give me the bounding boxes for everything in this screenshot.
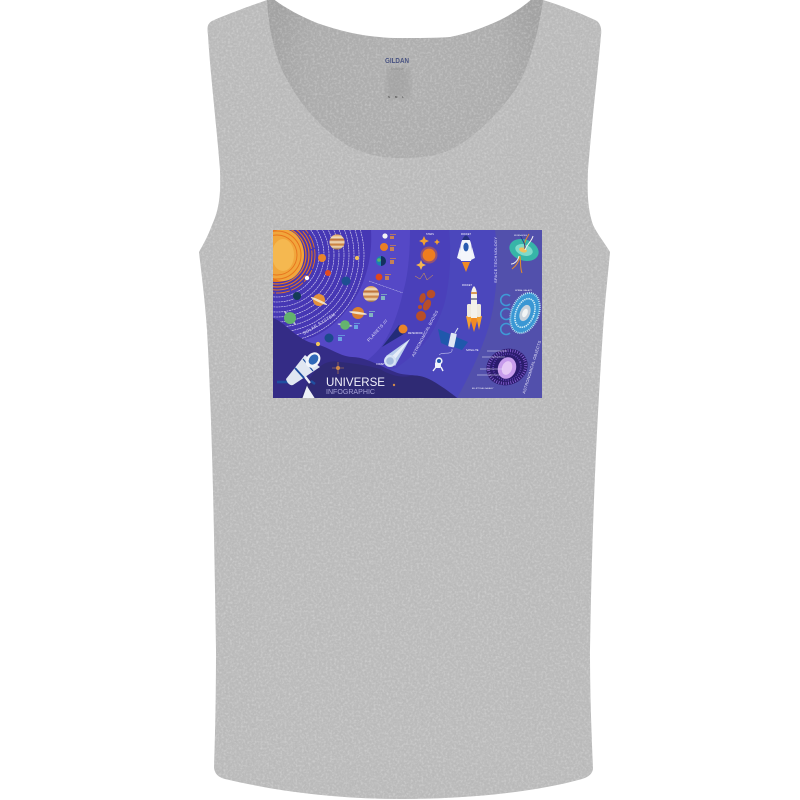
band: astronomical bodies — [273, 230, 450, 398]
mount — [303, 374, 310, 383]
icon: elliptical galaxy — [481, 343, 533, 391]
planet: red — [325, 270, 331, 276]
stars caption: STARS — [426, 233, 434, 236]
planet: saturn — [310, 294, 328, 306]
icon: white comet — [384, 339, 410, 367]
rocket caption: ROCKET — [461, 233, 472, 236]
lens rim — [303, 349, 323, 371]
planet: orange — [318, 254, 326, 262]
band: space technology — [390, 230, 497, 398]
planets column — [316, 233, 403, 346]
planet: dark teal — [293, 292, 301, 300]
tube bands — [295, 368, 304, 378]
label small text: Softstyle — [390, 67, 404, 71]
planet: yellow — [355, 256, 359, 260]
neck opening — [262, 0, 533, 38]
icon: large rocket — [466, 286, 482, 332]
planet: green ringed — [284, 311, 296, 325]
shirt body — [199, 0, 610, 799]
band: planets — [306, 230, 410, 360]
icon: star large — [419, 236, 429, 246]
planet: blue — [324, 334, 334, 342]
icon: glowing star — [420, 246, 438, 264]
tripod — [303, 387, 314, 398]
icon: constellation — [415, 273, 433, 280]
section label: solar system: SOLAR SYSTEM — [302, 312, 337, 336]
icon: small rocket — [457, 235, 475, 272]
fabric texture — [190, 0, 620, 800]
galaxy caption: SPIRAL GALAXY — [515, 289, 533, 292]
satellite caption: SATELLITE — [466, 349, 479, 352]
icon: spiral galaxy — [505, 288, 545, 338]
icon: orange comet — [382, 324, 408, 347]
icon: satellite — [438, 328, 468, 350]
galaxy pointer lines — [477, 351, 507, 375]
planet: earth — [376, 256, 386, 266]
section label: astronomical bodies: ASTRONOMICAL BODIES — [410, 309, 439, 357]
focuser handle — [277, 381, 288, 383]
darkest hill — [300, 361, 458, 399]
dark foreground hills — [273, 318, 460, 400]
planet: blue — [342, 276, 350, 286]
band: solar system — [273, 230, 371, 345]
neck label — [385, 58, 410, 99]
solar orbits — [273, 230, 364, 338]
planet: orange — [380, 243, 388, 251]
planet: white moon — [382, 233, 388, 239]
icon: star small — [434, 239, 440, 245]
section label: space technology: SPACE TECHNOLOGY — [493, 237, 498, 283]
elliptical caption: ELLIPTICAL GALAXY — [472, 387, 494, 390]
galaxy stage arcs — [501, 294, 510, 335]
tube — [286, 355, 320, 385]
planet data labels — [385, 234, 396, 280]
icon: telescope — [277, 349, 323, 398]
label printed shadow — [386, 68, 410, 98]
icon: wormhole disk — [506, 234, 542, 273]
planet: saturn — [349, 307, 367, 319]
subtitle: INFOGRAPHIC — [326, 387, 376, 396]
small star — [393, 384, 395, 386]
planets divider line — [369, 281, 403, 293]
brand name: GILDAN — [385, 58, 409, 65]
solar system planets — [283, 234, 359, 326]
icon: star bottom — [416, 260, 426, 270]
inside back of neck — [267, 0, 543, 158]
section label: astronomical objects: ASTRONOMICAL OBJECTS — [521, 340, 542, 394]
size row: S M L — [388, 95, 406, 99]
planet: jupiter — [363, 286, 379, 302]
lens glass — [307, 353, 320, 366]
comet caption: COMET — [376, 363, 385, 366]
planet: yellow — [316, 342, 320, 346]
planet: white — [305, 276, 309, 280]
section label: planets: PLANETS /// — [366, 318, 389, 343]
infographic artwork — [273, 230, 542, 398]
planet: green ringed — [337, 320, 353, 330]
wormhole caption: WORMHOLE — [514, 235, 528, 237]
tank top shirt — [190, 0, 620, 800]
launch caption: ROCKET — [462, 284, 473, 287]
main title: UNIVERSE — [326, 375, 385, 389]
icon: sun — [273, 230, 316, 294]
outer band: astronomical objects — [457, 230, 542, 398]
icon: asteroids — [416, 290, 435, 321]
icon: astronaut — [433, 349, 452, 371]
decorative sparkle — [336, 366, 340, 370]
planet: red — [376, 274, 382, 280]
planet: jupiter — [329, 234, 345, 250]
meteoroid caption: METEOROID — [408, 332, 423, 335]
